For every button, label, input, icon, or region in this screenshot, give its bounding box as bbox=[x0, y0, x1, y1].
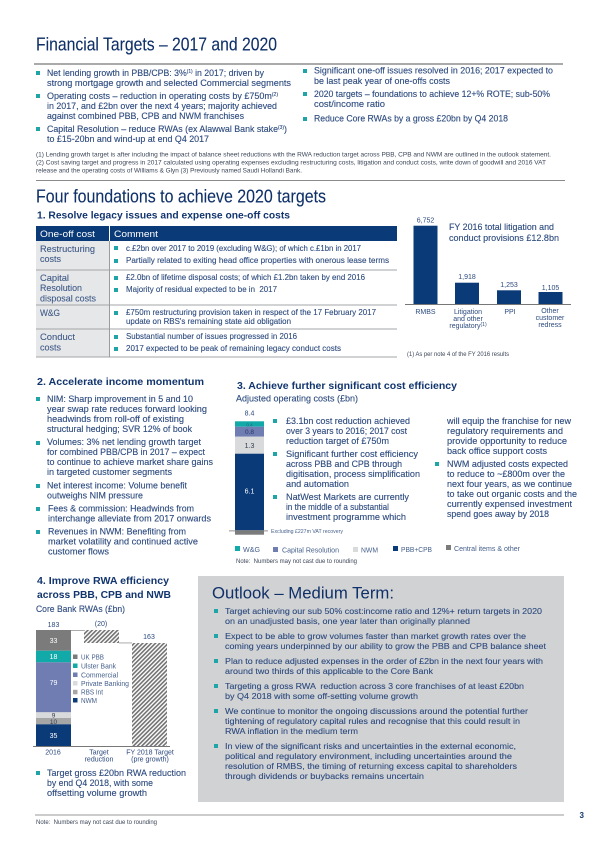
bullet: operating costs: (2) bbox=[272, 92, 278, 98]
bullet: revenues in NWM: Revenues in NWM: Benefiting from bbox=[48, 526, 186, 536]
stacked bar: adjusted operating costs: 8.4 bbox=[245, 410, 254, 418]
bullet: fees and commission: Fees & commission: Headwinds from bbox=[48, 504, 194, 514]
bullet: volumes: Volumes: 3% net lending growth target bbox=[47, 437, 201, 447]
row: conduct costs: costs bbox=[40, 342, 61, 352]
bullet: 2020 targets bbox=[303, 89, 550, 109]
bullet: risks and uncertainties bbox=[214, 742, 517, 781]
bullet: NatWest Markets: NatWest Markets are currently bbox=[286, 492, 409, 502]
row: restructuring costs: c.£2bn over 2017 to 2019 (excluding W&G); of which c.£1bn in 2017 bbox=[126, 244, 362, 253]
bullet: revenues in NWM: customer flows bbox=[48, 546, 109, 556]
row: capital resolution disposal costs: £2.0bn of lifetime disposal costs; of which £1.2bn taken by end 2016 bbox=[126, 273, 366, 282]
waterfall chart: core bank RWAs bbox=[33, 621, 174, 764]
bullet: reduce expenses: around two thirds of this applicable to the Core Bank bbox=[225, 667, 434, 676]
waterfall chart: core bank RWAs: 183 bbox=[48, 622, 59, 629]
legend: operating costs: PBB+CPB bbox=[401, 547, 432, 554]
bullet: fees and commission bbox=[36, 504, 211, 524]
bar chart: litigation and conduct provisions: Litigation bbox=[454, 309, 482, 316]
legend: operating costs: NWM bbox=[361, 548, 378, 554]
bar chart: litigation and conduct provisions: Other bbox=[541, 308, 559, 315]
footnotes: financial targets: (1) Lending growth target is after including the impact of balance sheet reductions with the RWA reduction target across PBB, CPB and NWM are outlined in the outlook statement. bbox=[36, 152, 551, 158]
legend: operating costs: Central items & other bbox=[454, 546, 521, 553]
heading: section 2: 2. Accelerate income momentum bbox=[37, 376, 204, 388]
bullet: revenues in NWM bbox=[36, 526, 198, 556]
waterfall chart: core bank RWAs: 9 bbox=[52, 712, 56, 720]
bullet: regulatory capital rules bbox=[214, 707, 528, 736]
bullet: capital resolution bbox=[36, 124, 287, 144]
bullet: cost reduction achieved: reduction target of £750m bbox=[286, 436, 389, 446]
bullet: cost reduction achieved: over 3 years to 2016; 2017 cost bbox=[286, 426, 407, 436]
footnotes: financial targets: release and the operating costs of Williams & Glyn (3) Previously named Saudi Hollandi Bank. bbox=[36, 168, 302, 174]
row: W&G: £750m restructuring provision taken in respect of the 17 February 2017 bbox=[126, 308, 377, 317]
bullet: volumes: to continue to achieve market share gains bbox=[47, 457, 213, 467]
bullet: NatWest Markets: investment programme which bbox=[286, 512, 406, 522]
bullet: target gross RWA reduction bbox=[36, 768, 186, 798]
heading: section 1: 1. Resolve legacy issues and expense one-off costs bbox=[37, 210, 290, 222]
bar chart: litigation and conduct provisions: and other bbox=[453, 316, 483, 323]
bullet: grow volumes bbox=[214, 632, 547, 651]
bullet: one-off issues: Significant one-off issues resolved in 2016; 2017 expected to bbox=[314, 66, 553, 76]
bar chart: litigation and conduct provisions: RMBS bbox=[415, 309, 436, 316]
bullet: operating costs: in 2017, and £2bn over the next 4 years; majority achieved bbox=[47, 101, 277, 111]
bullet: risks and uncertainties: political and regulatory environment, including uncertainties around the bbox=[225, 752, 513, 761]
bullet: cost income target bbox=[214, 607, 543, 626]
row: W&G: W&G bbox=[40, 308, 60, 318]
legend: RWA segments: Private Banking bbox=[81, 681, 129, 688]
bullet: NWM adjusted costs bbox=[435, 459, 577, 519]
waterfall chart: core bank RWAs: Target bbox=[89, 750, 109, 756]
bullet: risks and uncertainties: In view of the significant risks and uncertainties in the external economic, bbox=[225, 742, 516, 751]
footnotes: financial targets bbox=[36, 152, 551, 174]
chart subtitle: Core Bank RWAs (£bn) bbox=[36, 604, 125, 614]
heading: section 3: 3. Achieve further significant cost efficiency bbox=[237, 380, 457, 392]
table header: Comment bbox=[114, 229, 158, 239]
bullet: NWM adjusted costs: next four years, as we continue bbox=[447, 479, 572, 489]
bullet: NatWest Markets: provide opportunity to reduce bbox=[447, 436, 567, 446]
bullet: further cost efficiency bbox=[273, 449, 420, 489]
bar chart: litigation and conduct provisions: 1,918 bbox=[458, 274, 476, 281]
row: W&G: update on RBS's remaining state aid obligation bbox=[126, 317, 291, 326]
bullet: net lending growth: (1) bbox=[187, 69, 193, 75]
bullet: regulatory capital rules: We continue to monitor the ongoing discussions around the potential further bbox=[225, 707, 528, 716]
bullet: revenues in NWM: market volatility and continued active bbox=[48, 536, 198, 546]
bullet: 2020 targets: cost/income ratio bbox=[314, 99, 385, 109]
bullet: NWM adjusted costs: NWM adjusted costs expected bbox=[447, 459, 568, 469]
waterfall chart: core bank RWAs: 163 bbox=[143, 634, 155, 641]
bullet: cost reduction achieved bbox=[273, 416, 410, 446]
stacked bar: adjusted operating costs: 6.1 bbox=[245, 488, 254, 496]
row: W&G bbox=[40, 308, 377, 326]
waterfall chart: core bank RWAs: 2016 bbox=[45, 750, 61, 756]
title: financial targets: Financial Targets – 2017 and 2020 bbox=[36, 34, 277, 54]
legend: RWA segments: Ulster Bank bbox=[81, 663, 116, 670]
heading: section 4: across PBB, CPB and NWB bbox=[37, 589, 171, 601]
bar chart: litigation and conduct provisions: 6,752 bbox=[417, 218, 434, 224]
panel: section 4 RWA efficiency bbox=[33, 575, 186, 798]
bullet: further cost efficiency: digitisation, process simplification bbox=[286, 469, 420, 479]
bullet: net interest income: Net interest income: Volume benefit bbox=[47, 480, 187, 490]
bar chart: litigation and conduct provisions: 1,253 bbox=[500, 282, 518, 289]
bullet: NIM: structural hedging; SVR 12% of book bbox=[47, 424, 192, 434]
chart title: conduct provisions £12.8bn bbox=[449, 233, 559, 243]
panel: financial targets right bullets bbox=[303, 66, 553, 124]
bullet: target gross RWA reduction: by end Q4 2018, with some bbox=[47, 778, 153, 788]
bullet: NatWest Markets: in the middle of a substantial bbox=[286, 502, 389, 512]
legend: RWA segments: UK PBB bbox=[81, 654, 104, 661]
bullet: 2020 targets: 2020 targets – foundations to achieve 12+% ROTE; sub-50% bbox=[314, 89, 550, 99]
waterfall chart: core bank RWAs: 35 bbox=[50, 733, 57, 740]
legend: RWA segments: Commercial bbox=[81, 672, 118, 679]
legend: operating costs: Capital Resolution bbox=[282, 548, 339, 554]
stacked bar: adjusted operating costs bbox=[229, 410, 343, 535]
page number: 3 bbox=[580, 811, 584, 820]
legend: RWA segments: RBS Int bbox=[81, 690, 103, 697]
bar chart: litigation and conduct provisions: (1) bbox=[481, 322, 487, 328]
legend: operating costs bbox=[235, 545, 521, 554]
bullet: operating costs bbox=[36, 91, 278, 121]
waterfall chart: core bank RWAs: (20) bbox=[95, 621, 107, 628]
bullet: regulatory capital rules: tightening of regulatory capital rules and recognise that this could result in bbox=[225, 717, 520, 726]
bullet: reduce expenses: Plan to reduce adjusted expenses in the order of £2bn in the next four years with bbox=[225, 657, 543, 666]
row: capital resolution disposal costs: Resolution bbox=[40, 283, 82, 293]
bullet: reduce expenses bbox=[214, 657, 543, 676]
row: capital resolution disposal costs: Majority of residual expected to be in 2017 bbox=[126, 285, 278, 294]
bullet: capital resolution: to £15-20bn and wind-up at end Q4 2017 bbox=[47, 134, 209, 144]
chart title bbox=[449, 222, 559, 243]
bullet: grow volumes: coming years underpinned by our ability to grow the PBB and CPB balance sheet bbox=[225, 642, 547, 651]
bullet: NIM: NIM: Sharp improvement in 5 and 10 bbox=[47, 394, 193, 404]
stacked bar: adjusted operating costs: Excluding £227m VAT recovery bbox=[271, 529, 343, 535]
bullet: NatWest Markets: back office support costs bbox=[447, 446, 548, 456]
bullet: NWM adjusted costs: to take out organic costs and the bbox=[447, 489, 577, 499]
heading: four foundations: Four foundations to achieve 2020 targets bbox=[36, 186, 326, 206]
legend: RWA segments bbox=[73, 654, 129, 705]
bullet: NatWest Markets: regulatory requirements and bbox=[447, 426, 563, 436]
footer note: rounding: Note: Numbers may not cast due to rounding bbox=[36, 819, 158, 826]
chart title: FY 2016 total litigation and bbox=[449, 222, 554, 232]
bullet: further cost efficiency: across PBB and CPB through bbox=[286, 459, 402, 469]
table header bbox=[36, 226, 397, 241]
legend: operating costs: W&G bbox=[243, 547, 260, 554]
waterfall chart: core bank RWAs: FY 2018 Target bbox=[126, 750, 174, 756]
bullet: volumes bbox=[36, 437, 213, 477]
bullet: cost income target: on an unadjusted basis, one year later than originally planned bbox=[225, 617, 470, 626]
panel: section 2 accelerate income momentum bbox=[36, 376, 213, 556]
row: restructuring costs: Restructuring bbox=[40, 244, 95, 254]
bullet: NWM adjusted costs: to reduce to ~£800m over the bbox=[447, 469, 565, 479]
waterfall chart: core bank RWAs: (pre growth) bbox=[131, 756, 169, 764]
panel: financial targets left bullets bbox=[36, 68, 291, 144]
bullet: capital resolution: (3) bbox=[278, 125, 284, 131]
bar chart: litigation and conduct provisions: redress bbox=[538, 322, 562, 329]
bar chart: litigation and conduct provisions bbox=[405, 218, 571, 330]
bullet: further cost efficiency: and automation bbox=[286, 479, 349, 489]
bullet: one-off issues bbox=[303, 66, 553, 86]
bullet: volumes: in targeted customer segments bbox=[47, 467, 173, 477]
bullet: net interest income bbox=[36, 480, 187, 500]
waterfall chart: core bank RWAs: reduction bbox=[85, 756, 114, 764]
bullet: risks and uncertainties: through dividends or buybacks remains uncertain bbox=[225, 772, 424, 781]
bullet: net lending growth: Net lending growth in PBB/CPB: 3% bbox=[47, 68, 191, 78]
bullet: NWM adjusted costs: spend goes away by 2018 bbox=[447, 509, 549, 519]
heading: section 4 bbox=[37, 575, 171, 601]
bullet: NatWest Markets: will equip the franchise for new bbox=[446, 416, 571, 426]
bullet: further cost efficiency: Significant further cost efficiency bbox=[286, 449, 419, 459]
stacked bar: adjusted operating costs: 0.8 bbox=[245, 429, 254, 436]
bullet: RWA reduction bbox=[214, 682, 524, 701]
bullet: NIM: headwinds from roll-off of existing bbox=[47, 414, 184, 424]
row: conduct costs: Conduct bbox=[40, 332, 75, 342]
waterfall chart: core bank RWAs: 10 bbox=[50, 719, 57, 726]
bar chart: litigation and conduct provisions: 1,105 bbox=[542, 285, 559, 292]
bullet: risks and uncertainties: resolution of RMBS, the timing of returning excess capital to shareholders bbox=[225, 762, 517, 771]
bullet: RWA reduction: by Q4 2018 with some off-setting volume growth bbox=[225, 692, 418, 701]
bullet: NIM: year swap rate reduces forward looking bbox=[47, 404, 207, 414]
bullet: net lending growth: strong mortgage growth and selected Commercial segments bbox=[47, 78, 291, 88]
row: restructuring costs bbox=[40, 244, 389, 265]
bar chart: litigation and conduct provisions: regulatory bbox=[449, 323, 481, 330]
note: rounding: Note: Numbers may not cast due to rounding bbox=[236, 558, 358, 565]
bullet: net interest income: outweighs NIM pressure bbox=[47, 490, 143, 500]
waterfall chart: core bank RWAs: 18 bbox=[50, 654, 57, 661]
bullet: net lending growth: in 2017; driven by bbox=[193, 68, 264, 78]
row: capital resolution disposal costs: disposal costs bbox=[40, 294, 96, 304]
row: restructuring costs: costs bbox=[40, 254, 61, 264]
row: conduct costs: 2017 expected to be peak of remaining legacy conduct costs bbox=[126, 344, 341, 353]
bullet: grow volumes: Expect to be able to grow volumes faster than market growth rates over the bbox=[225, 632, 527, 641]
bullet: one-off issues: be last peak year of one-offs costs bbox=[314, 76, 450, 86]
panel: outlook medium term bbox=[198, 576, 564, 802]
footnotes: financial targets: (2) Cost saving target and progress in 2017 calculated using operating expenses excluding restructuring costs, litigation and conduct costs, write down of goodwill and 2016 VAT bbox=[36, 160, 546, 166]
table header: One-off cost bbox=[40, 229, 95, 239]
heading: outlook: Outlook – Medium Term: bbox=[212, 584, 394, 602]
bullet: capital resolution: Capital Resolution – reduce RWAs (ex Alawwal Bank stake bbox=[47, 124, 282, 134]
stacked bar: adjusted operating costs: 0.4 bbox=[246, 422, 253, 427]
bullet: operating costs: against combined PBB, CPB and NWM franchises bbox=[47, 111, 244, 121]
table: one-off costs bbox=[36, 226, 397, 358]
bullet: capital resolution: ) bbox=[284, 124, 287, 134]
waterfall chart: core bank RWAs: 79 bbox=[50, 680, 57, 687]
bullet: net lending growth bbox=[36, 68, 291, 88]
stacked bar: adjusted operating costs: 1.3 bbox=[245, 443, 254, 450]
bullet: target gross RWA reduction: Target gross £20bn RWA reduction bbox=[47, 768, 186, 778]
bullet: operating costs: Operating costs – reduction in operating costs by £750m bbox=[47, 91, 272, 101]
bullet: NIM bbox=[36, 394, 207, 434]
bullet: cost reduction achieved: £3.1bn cost reduction achieved bbox=[286, 416, 410, 426]
bullet: target gross RWA reduction: offsetting volume growth bbox=[47, 788, 147, 798]
bullet: NWM adjusted costs: currently expensed investment bbox=[447, 499, 573, 509]
bar chart: litigation and conduct provisions: PPI bbox=[504, 309, 516, 316]
panel: section 3 cost efficiency bbox=[229, 380, 577, 565]
bullet: volumes: for combined PBB/CPB in 2017 – expect bbox=[47, 447, 205, 457]
row: conduct costs: Substantial number of issues progressed in 2016 bbox=[126, 332, 298, 341]
row: capital resolution disposal costs bbox=[40, 273, 366, 304]
waterfall chart: core bank RWAs: 33 bbox=[50, 638, 57, 645]
bullet: cost income target: Target achieving our sub 50% cost:income ratio and 12%+ return targets in 2020 bbox=[225, 607, 543, 616]
row: conduct costs bbox=[40, 332, 341, 353]
bullet: fees and commission: interchange alleviate from 2017 onwards bbox=[48, 514, 211, 524]
chart footnote: (1) As per note 4 of the FY 2016 results bbox=[407, 351, 509, 358]
bullet: reduce core RWAs: Reduce Core RWAs by a gross £20bn by Q4 2018 bbox=[314, 114, 508, 124]
bullet: regulatory capital rules: RWA inflation in the medium term bbox=[225, 727, 358, 736]
row: restructuring costs: Partially related to exiting head office properties with onerous lease terms bbox=[126, 256, 389, 265]
bar chart: litigation and conduct provisions: customer bbox=[536, 315, 565, 322]
legend: RWA segments: NWM bbox=[81, 698, 97, 705]
bullet: RWA reduction: Targeting a gross RWA reduction across 3 core franchises of at least £20bn bbox=[225, 682, 524, 691]
chart subtitle: Adjusted operating costs (£bn) bbox=[236, 394, 358, 404]
heading: section 4: 4. Improve RWA efficiency bbox=[37, 575, 169, 587]
row: capital resolution disposal costs: Capital bbox=[40, 273, 69, 283]
bullet: NatWest Markets bbox=[273, 416, 571, 522]
